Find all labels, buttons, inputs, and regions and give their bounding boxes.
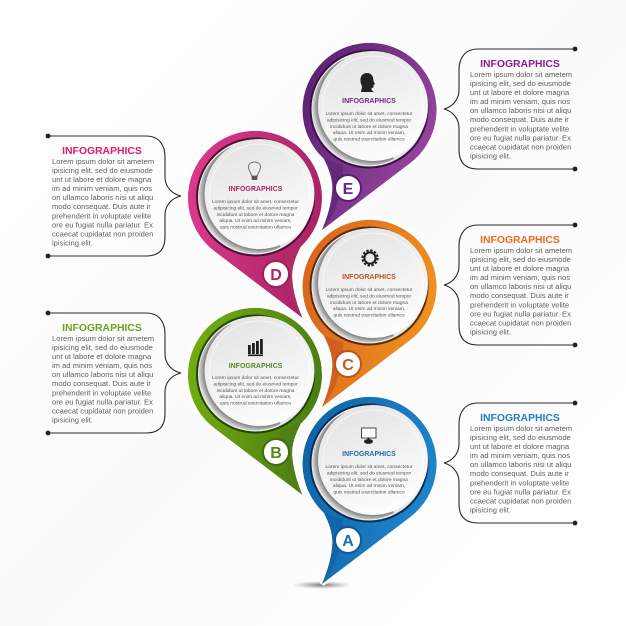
pin D tail fold bbox=[280, 247, 302, 318]
pin C body bbox=[303, 220, 437, 407]
title D: INFOGRAPHICS bbox=[229, 186, 283, 193]
body E: ipisicing elit, sed do eiusmode bbox=[470, 79, 571, 88]
text E: incididunt ut labore et dolore magna bbox=[330, 124, 408, 130]
text B: quis nostrud exercitation ullamco bbox=[220, 401, 291, 407]
body D: ipisicing elit, sed do eiusmode bbox=[52, 166, 153, 175]
body C: modo consequat. Duis aute ir bbox=[470, 291, 569, 300]
letter B bbox=[263, 439, 289, 465]
body C: unt ut labore et dolore magna bbox=[470, 264, 570, 273]
body D: modo consequat. Duis aute ir bbox=[52, 202, 151, 211]
body E: prehenderit in voluptate velite bbox=[470, 124, 569, 133]
text A: adipisicing elit, sed do eiusmod tempor bbox=[327, 470, 412, 476]
text D: adipisicing elit, sed do eiusmod tempor bbox=[213, 205, 298, 211]
callout D bbox=[46, 134, 181, 258]
body C: prehenderit in voluptate velite bbox=[470, 300, 569, 309]
body C: im ad minim veniam, quis nos bbox=[470, 273, 570, 282]
title B: INFOGRAPHICS bbox=[229, 363, 283, 370]
pin B disc bbox=[196, 314, 315, 434]
body C: ipisicing elit. bbox=[470, 328, 511, 337]
pin C tail fold bbox=[322, 336, 343, 407]
heading C: INFOGRAPHICS bbox=[480, 235, 560, 246]
callout A bbox=[444, 401, 577, 525]
text C: quis nostrud exercitation ullamco bbox=[333, 313, 405, 319]
body E: on ullamco laboris nisi ut aliqu bbox=[470, 106, 571, 115]
body B: Lorem ipsum dolor sit ametem bbox=[52, 334, 154, 343]
letter E bbox=[335, 175, 361, 201]
letter C: C bbox=[342, 357, 354, 374]
body E bbox=[470, 70, 572, 161]
pin B tail fold bbox=[280, 424, 302, 495]
pin A tail fold bbox=[322, 513, 343, 584]
body B: on ullamco laboris nisi ut aliqu bbox=[52, 370, 153, 379]
body A: im ad minim veniam, quis nos bbox=[470, 451, 570, 460]
dots E bbox=[573, 47, 577, 171]
text B: Lorem ipsum dolor sit amet, consectetur bbox=[212, 375, 299, 381]
text C bbox=[326, 287, 413, 319]
body B bbox=[52, 334, 154, 425]
body D: ccaecat cupidatat non proiden bbox=[52, 230, 153, 238]
body A: unt ut labore et dolore magna bbox=[470, 442, 570, 451]
letter D: D bbox=[270, 267, 282, 284]
pin E bbox=[303, 43, 437, 230]
body A bbox=[470, 424, 572, 515]
body B: ore eu fugiat nulla pariatur. Ex bbox=[52, 397, 153, 406]
body E: ore eu fugiat nulla pariatur. Ex bbox=[470, 133, 571, 142]
body D: im ad minim veniam, quis nos bbox=[52, 184, 152, 193]
text C: adipisicing elit, sed do eiusmod tempor bbox=[327, 293, 412, 299]
body D: Lorem ipsum dolor sit ametem bbox=[52, 157, 154, 166]
body C: Lorem ipsum dolor sit ametem bbox=[470, 246, 572, 255]
body C bbox=[470, 246, 572, 337]
body D: ipisicing elit. bbox=[52, 239, 93, 248]
brace B bbox=[48, 313, 181, 433]
text E: quis nostrud exercitation ullamco bbox=[333, 137, 405, 143]
text C: Lorem ipsum dolor sit amet, consectetur bbox=[326, 287, 413, 293]
pin A bbox=[303, 397, 437, 584]
body B: modo consequat. Duis aute ir bbox=[52, 379, 151, 388]
body A: ore eu fugiat nulla pariatur. Ex bbox=[470, 487, 571, 496]
body D bbox=[52, 157, 154, 248]
body C: ipisicing elit, sed do eiusmode bbox=[470, 255, 571, 264]
text D: aliqua. Ut enim ad minim veniam, bbox=[219, 218, 292, 224]
body D: unt ut labore et dolore magna bbox=[52, 175, 152, 184]
pin E disc bbox=[310, 50, 428, 168]
icon: light bulb bbox=[248, 162, 260, 180]
dots C bbox=[573, 223, 577, 347]
pin D bbox=[188, 131, 322, 318]
text A: incididunt ut labore et dolore magna bbox=[330, 477, 408, 483]
text C: incididunt ut labore et dolore magna bbox=[330, 300, 408, 306]
text E: adipisicing elit, sed do eiusmod tempor bbox=[327, 117, 412, 123]
text E bbox=[326, 111, 413, 143]
pin D body bbox=[188, 131, 322, 318]
body A: prehenderit in voluptate velite bbox=[470, 478, 569, 487]
body E: unt ut labore et dolore magna bbox=[470, 88, 570, 97]
letter A: A bbox=[342, 533, 354, 550]
text C: aliqua. Ut enim ad minim veniam, bbox=[333, 306, 405, 312]
body B: unt ut labore et dolore magna bbox=[52, 352, 152, 361]
title A: INFOGRAPHICS bbox=[342, 451, 396, 458]
letter D bbox=[263, 261, 289, 287]
body E: Lorem ipsum dolor sit ametem bbox=[470, 70, 572, 79]
body E: ccaecat cupidatat non proiden bbox=[470, 142, 571, 152]
pin C bbox=[303, 220, 437, 407]
pin B bbox=[188, 308, 322, 495]
text E: Lorem ipsum dolor sit amet, consectetur bbox=[326, 111, 413, 117]
body E: ipisicing elit. bbox=[470, 152, 511, 161]
heading A: INFOGRAPHICS bbox=[480, 413, 560, 424]
heading E: INFOGRAPHICS bbox=[480, 59, 560, 70]
text D bbox=[212, 199, 299, 231]
icon: gear bbox=[362, 250, 378, 266]
dots D bbox=[46, 134, 50, 258]
text A: aliqua. Ut enim ad minim veniam, bbox=[333, 483, 405, 489]
body D: prehenderit in voluptate velite bbox=[52, 211, 151, 220]
body C: ccaecat cupidatat non proiden bbox=[470, 318, 571, 328]
pin C disc bbox=[310, 226, 428, 346]
icon: head bbox=[360, 73, 375, 92]
heading B: INFOGRAPHICS bbox=[62, 323, 142, 334]
body A: Lorem ipsum dolor sit ametem bbox=[470, 424, 572, 433]
text A: quis nostrud exercitation ullamco bbox=[333, 490, 405, 496]
text A bbox=[326, 464, 413, 496]
pin A disc bbox=[310, 404, 428, 522]
text B: aliqua. Ut enim ad minim veniam, bbox=[219, 394, 292, 400]
letter B: B bbox=[270, 445, 282, 462]
brace C bbox=[444, 225, 575, 345]
text E: aliqua. Ut enim ad minim veniam, bbox=[333, 130, 405, 136]
callout C bbox=[444, 223, 577, 347]
brace E bbox=[444, 49, 575, 169]
text B bbox=[212, 375, 299, 407]
letter E: E bbox=[343, 181, 354, 198]
pin E tail fold bbox=[322, 159, 343, 230]
pin B body bbox=[188, 308, 322, 495]
body B: im ad minim veniam, quis nos bbox=[52, 361, 152, 370]
pin E body bbox=[303, 43, 437, 230]
title E: INFOGRAPHICS bbox=[342, 98, 396, 105]
body D: ore eu fugiat nulla pariatur. Ex bbox=[52, 220, 153, 229]
body E: modo consequat. Duis aute ir bbox=[470, 115, 569, 124]
heading D: INFOGRAPHICS bbox=[62, 146, 142, 157]
icon: monitor bbox=[362, 428, 376, 444]
letter A bbox=[335, 527, 361, 553]
callout B bbox=[46, 311, 181, 435]
brace D bbox=[48, 136, 181, 256]
body C: ore eu fugiat nulla pariatur. Ex bbox=[470, 309, 571, 318]
body A: ipisicing elit. bbox=[470, 506, 511, 515]
text B: incididunt ut labore et dolore magna bbox=[217, 388, 295, 394]
body B: ipisicing elit, sed do eiusmode bbox=[52, 343, 153, 352]
body A: on ullamco laboris nisi ut aliqu bbox=[470, 460, 571, 469]
dots B bbox=[46, 311, 50, 435]
body D: on ullamco laboris nisi ut aliqu bbox=[52, 193, 153, 202]
shadow under bottom pin bbox=[292, 581, 352, 589]
text B: adipisicing elit, sed do eiusmod tempor bbox=[213, 381, 298, 387]
text D: incididunt ut labore et dolore magna bbox=[217, 212, 295, 218]
icon: bar chart bbox=[248, 339, 263, 356]
brace A bbox=[444, 403, 575, 523]
text D: quis nostrud exercitation ullamco bbox=[220, 225, 291, 231]
title C: INFOGRAPHICS bbox=[342, 274, 396, 281]
body A: modo consequat. Duis aute ir bbox=[470, 469, 569, 478]
letter C bbox=[335, 351, 361, 377]
body C: on ullamco laboris nisi ut aliqu bbox=[470, 282, 571, 291]
body A: ipisicing elit, sed do eiusmode bbox=[470, 433, 571, 442]
pin D disc bbox=[196, 138, 315, 256]
text D: Lorem ipsum dolor sit amet, consectetur bbox=[212, 199, 299, 205]
text A: Lorem ipsum dolor sit amet, consectetur bbox=[326, 464, 413, 470]
body B: prehenderit in voluptate velite bbox=[52, 388, 151, 397]
body A: ccaecat cupidatat non proiden bbox=[470, 496, 571, 506]
body B: ipisicing elit. bbox=[52, 416, 93, 425]
callout E bbox=[444, 47, 577, 171]
pin A body bbox=[303, 397, 437, 584]
body E: im ad minim veniam, quis nos bbox=[470, 97, 570, 106]
body B: ccaecat cupidatat non proiden bbox=[52, 406, 153, 416]
dots A bbox=[573, 401, 577, 525]
